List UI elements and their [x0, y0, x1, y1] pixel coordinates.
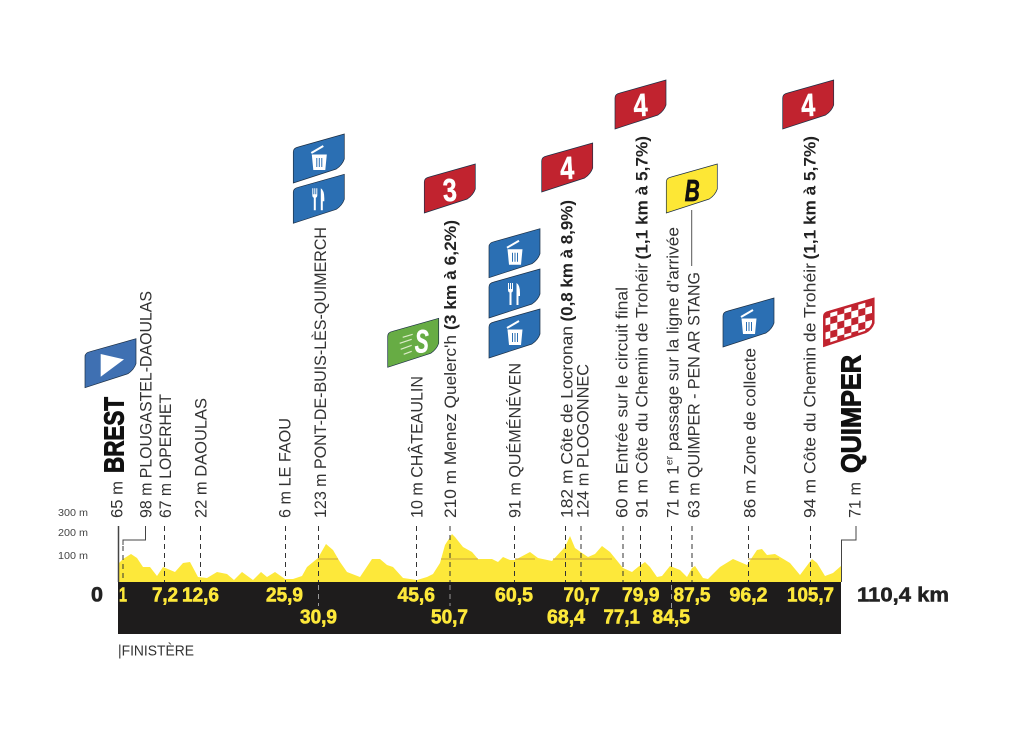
place labels: 60 m Entrée sur le circuit final: [614, 287, 632, 518]
elevation profile: [118, 534, 841, 582]
kilometre labels: 87,5: [674, 585, 710, 607]
place labels: 71 m: [847, 482, 865, 518]
flag: feed zone Quéménéven: [489, 269, 540, 318]
total distance: 110,4 km: [857, 585, 949, 607]
place labels: [98, 136, 867, 518]
flag: climb category 4 Locronan: 4: [559, 150, 575, 186]
flag: sprint Châteaulin: [388, 318, 439, 367]
place labels: 22 m DAOULAS: [193, 398, 211, 518]
kilometre labels: 45,6: [398, 585, 435, 607]
flag: climb category 3: [424, 164, 475, 213]
altitude scale: 100 m: [58, 550, 88, 562]
kilometre labels: 30,9: [300, 606, 337, 628]
place labels: BREST: [98, 397, 129, 473]
kilometre labels: 96,2: [730, 585, 768, 607]
place labels: 94 m Côte du Chemin de Trohéir: [802, 262, 820, 518]
flag: climb category 3: 3: [442, 172, 458, 208]
place labels: (3 km à 6,2%): [442, 220, 460, 330]
flag: climb category 4 Trohéir first: [615, 80, 666, 129]
place labels: 65 m: [108, 481, 126, 518]
flag: bin zone Quéménéven bottom: [489, 309, 540, 358]
place labels: 182 m Côte de Locronan: [559, 326, 577, 518]
flag: bin zone Quéménéven top: [489, 229, 540, 278]
kilometre labels: 84,5: [652, 606, 690, 628]
place labels: 63 m QUIMPER - PEN AR STANG: [685, 272, 703, 518]
place labels: 86 m Zone de collecte: [742, 348, 760, 518]
flag: start Brest: [85, 339, 136, 388]
place labels: QUIMPER: [836, 355, 867, 473]
place labels: passage sur la ligne d'arrivée: [664, 227, 682, 456]
dashed kilometre markers: [123, 526, 810, 582]
place labels: 67 m LOPERHET: [157, 394, 175, 518]
zero label: 0: [91, 584, 103, 607]
place labels: 210 m Menez Quelerc'h: [442, 335, 460, 518]
department label: |FINISTÈRE: [118, 643, 194, 660]
place labels: (1,1 km à 5,7%): [634, 136, 652, 260]
kilometre labels: 12,6: [182, 585, 219, 607]
kilometre labels: [119, 585, 834, 628]
flag: sprint Châteaulin: S: [415, 323, 429, 359]
place labels: 123 m PONT-DE-BUIS-LÈS-QUIMERCH: [311, 227, 330, 518]
markers continuing in band: [318, 585, 672, 610]
start and finish connectors: [118, 526, 856, 582]
kilometre labels: 77,1: [604, 606, 640, 628]
leader line to bonus flag: [691, 210, 693, 266]
black distance band: [118, 582, 841, 634]
kilometre labels: 7,2: [152, 585, 178, 607]
kilometre labels: 25,9: [266, 585, 303, 607]
kilometre labels: 1: [119, 585, 127, 607]
kilometre labels: 70,7: [564, 585, 600, 607]
kilometre labels: 79,9: [622, 585, 660, 607]
flag: climb category 4 Trohéir first: 4: [632, 87, 648, 123]
flag: bin zone Pont-de-Buis: [293, 134, 344, 183]
altitude scale: [58, 507, 88, 562]
flag: finish checkered: [824, 299, 873, 346]
flag: feed zone Pont-de-Buis: [293, 174, 344, 223]
place labels: 91 m QUÉMÉNÉVEN: [506, 363, 525, 518]
flag: bin zone collecte: [723, 298, 774, 347]
kilometre labels: 50,7: [431, 606, 468, 628]
place labels: 98 m PLOUGASTEL-DAOULAS: [138, 291, 156, 518]
kilometre labels: 105,7: [787, 585, 834, 607]
kilometre labels: 68,4: [547, 606, 586, 628]
flag: bonus sprint B: B: [685, 173, 700, 208]
place labels: 10 m CHÂTEAULIN: [407, 376, 426, 518]
altitude scale: 300 m: [58, 507, 88, 519]
100 m reference segments: [318, 558, 779, 560]
flag: climb category 4 Locronan: [542, 143, 593, 192]
altitude scale: 200 m: [58, 527, 88, 539]
flag: climb category 4 Trohéir second: 4: [800, 87, 816, 123]
flag: climb category 4 Trohéir second: [783, 80, 834, 129]
place labels: (0,8 km à 8,9%): [559, 200, 577, 322]
place labels: 6 m LE FAOU: [277, 418, 295, 518]
place labels: (1,1 km à 5,7%): [802, 136, 820, 260]
place labels: er: [664, 455, 675, 465]
place labels: 124 m PLOGONNEC: [574, 364, 592, 518]
place labels: 71 m 1: [664, 468, 682, 518]
kilometre labels: 60,5: [495, 585, 533, 607]
flag: bonus sprint B: [666, 164, 717, 213]
place labels: 91 m Côte du Chemin de Trohéir: [634, 262, 652, 518]
